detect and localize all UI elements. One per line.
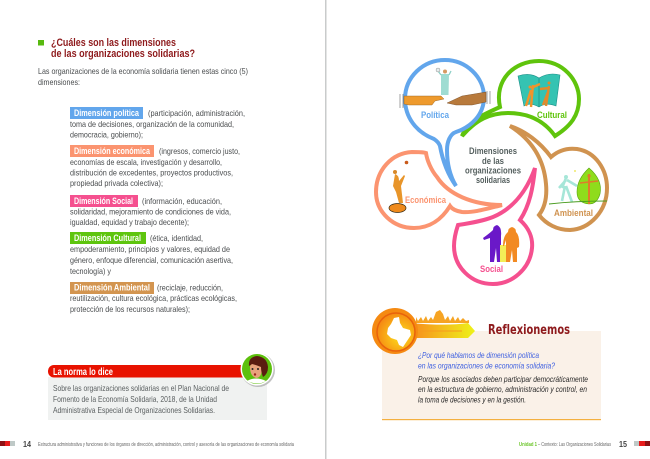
item: dimensión económica: (ingresos, comercio justo, <box>159 146 240 156</box>
center title: Dimensiones <box>469 146 517 157</box>
item: dimensión económica: propiedad privada colectiva); <box>70 178 163 188</box>
item: dimensión cultural: género, enfoque diferencial, comunicación asertiva, <box>70 255 233 265</box>
icon: hands and man <box>400 68 490 108</box>
center title <box>465 146 521 186</box>
item: dimensión social: igualdad, equidad y trabajo decente); <box>70 217 189 227</box>
diagram: dimensiones <box>376 60 607 284</box>
answer: la toma de decisiones y en la gestión. <box>418 394 526 404</box>
item: dimensión ambiental: reutilización, cultura ecológica, prácticas ecológicas, <box>70 293 237 303</box>
footer: left page <box>0 440 294 449</box>
item: dimensión económica <box>70 145 240 188</box>
center title: organizaciones <box>465 166 521 176</box>
item: dimensión ambiental: protección de los recursos naturales); <box>70 304 190 314</box>
icon: leaf with figures <box>549 168 607 204</box>
item: dimensión ambiental: Dimensión Ambiental <box>74 282 150 292</box>
label: económica: Económica <box>405 195 447 206</box>
question <box>418 350 555 370</box>
callout: reflexionemos <box>372 308 601 420</box>
item: dimensión económica: Dimensión económica <box>74 146 150 156</box>
item: dimensión social <box>70 195 231 227</box>
item: dimensión social: (información, educación, <box>142 196 222 206</box>
intro text: Las organizaciones de la economía solidaria tienen estas cinco (5) <box>38 66 248 76</box>
footer: right page <box>519 440 650 449</box>
footer: left page: Estructura administrativa y funciones de los órganos de dirección, administración, control y asesoría de las organizaciones de economía solidaria <box>38 442 294 448</box>
icon: figure on disc <box>389 161 408 212</box>
callout text: Administrativa Especial de Organizaciones Solidarias. <box>53 405 215 415</box>
icon: green heading bullet <box>38 40 44 46</box>
bubble: política <box>400 60 490 186</box>
item: dimensión cultural: tecnología) y <box>70 266 112 276</box>
footer: left page: 14 <box>23 440 31 449</box>
item: dimensión ambiental <box>70 282 237 314</box>
answer <box>418 374 588 404</box>
panel: left page content <box>38 37 248 314</box>
callout header bar <box>48 365 250 378</box>
icon: key with map <box>372 308 475 354</box>
icon: boy avatar <box>240 352 275 387</box>
footer: right page: Unidad 1 <box>519 442 537 448</box>
item: dimensión cultural: empoderamiento, principios y valores, equidad de <box>70 244 230 254</box>
heading: de las organizaciones solidarias? <box>51 48 195 60</box>
callout text: Fomento de la Economía Solidaria, 2018, de la Unidad <box>53 394 217 404</box>
bubble: ambiental <box>510 126 607 230</box>
footer: right page: 15 <box>619 440 627 449</box>
bubble: cultural <box>462 61 579 136</box>
heading <box>51 37 195 60</box>
item: dimensión política: (participación, administración, <box>148 108 245 118</box>
question: ¿Por qué hablamos de dimensión política <box>418 350 539 360</box>
item: dimensión política: toma de decisiones, organización de la comunidad, <box>70 119 234 129</box>
icon: book with figures <box>518 74 560 107</box>
callout: la norma lo dice <box>48 352 275 420</box>
heading: Reflexionemos <box>488 323 570 338</box>
item: dimensión económica: distribución de excedentes, proyectos productivos, <box>70 168 233 178</box>
item: dimensión política: democracia, gobierno); <box>70 130 143 140</box>
callout body <box>48 377 267 420</box>
footer: right page: – Contexto: Las Organizaciones Solidarias <box>538 442 611 448</box>
item: dimensión cultural: (ética, identidad, <box>150 233 203 243</box>
heading: ¿Cuáles son las dimensiones <box>51 37 176 49</box>
item: dimensión política <box>70 107 245 140</box>
item: dimensión social: solidaridad, mejoramiento de condiciones de vida, <box>70 206 231 216</box>
label: cultural: Cultural <box>537 110 567 121</box>
item: dimensión cultural <box>70 232 233 276</box>
callout text <box>53 383 229 415</box>
item: dimensión económica: economías de escala, investigación y desarrollo, <box>70 157 222 167</box>
item: dimensión ambiental: (reciclaje, reducción, <box>157 282 223 292</box>
answer: en la estructura de gobierno, administración y control, en <box>418 384 587 394</box>
item: dimensión social: Dimensión Social <box>74 196 133 206</box>
label: ambiental: Ambiental <box>554 208 593 219</box>
callout heading: La norma lo dice <box>53 367 113 378</box>
label: social: Social <box>480 264 503 275</box>
center title: solidarias <box>476 175 510 186</box>
answer: Porque los asociados deben participar democráticamente <box>418 374 588 384</box>
panel background <box>382 331 601 420</box>
callout text: Sobre las organizaciones solidarias en el Plan Nacional de <box>53 383 229 393</box>
bubble: social <box>454 168 535 284</box>
intro text: dimensiones: <box>38 77 80 87</box>
icon: family figures <box>483 225 519 262</box>
item: dimensión política: Dimensión política <box>74 108 139 118</box>
center title: de las <box>482 156 504 167</box>
item: dimensión cultural: Dimensión Cultural <box>74 233 141 243</box>
intro text <box>38 66 248 87</box>
question: en las organizaciones de economía solidaria? <box>418 360 555 370</box>
bubble: económica <box>376 152 502 228</box>
label: política: Política <box>421 110 450 121</box>
